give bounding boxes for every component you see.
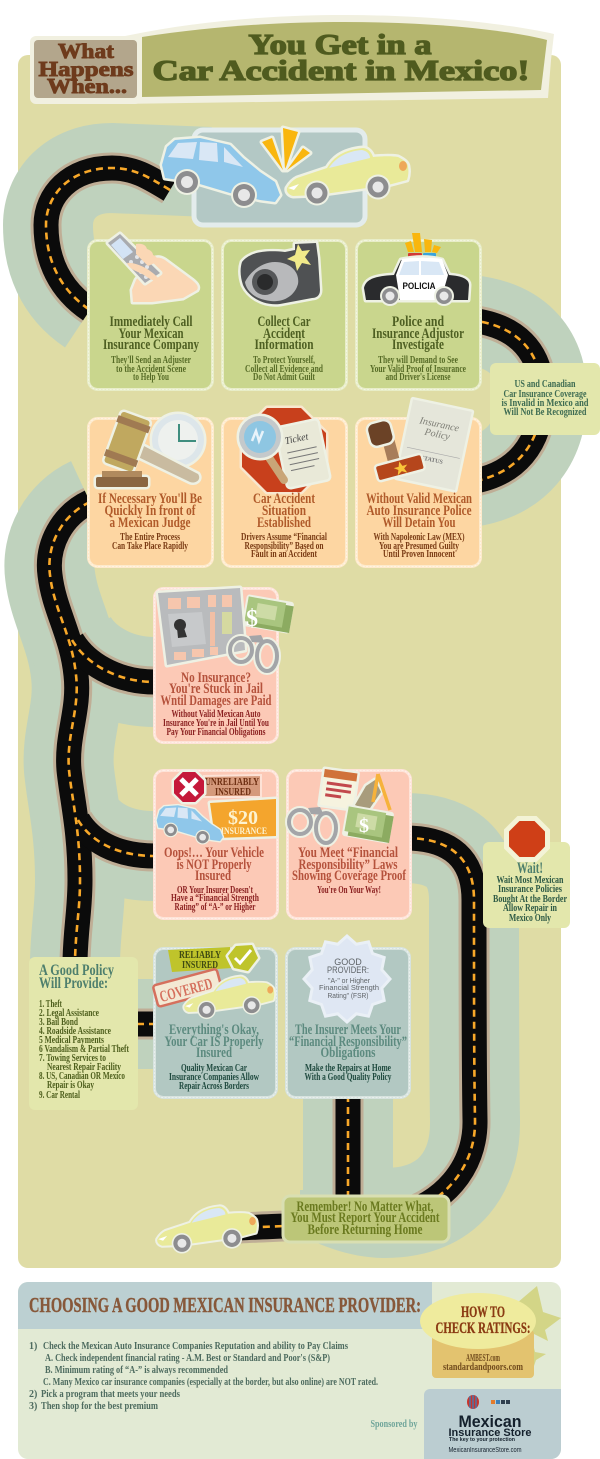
icon: stamp and policy document: STATUS [420, 455, 444, 466]
callout: wait [483, 816, 570, 928]
heading: is NOT Properly [176, 857, 252, 873]
body text [163, 709, 269, 738]
heading: Quickly In front of [104, 503, 196, 519]
body text: Drivers Assume “Financial [241, 532, 327, 543]
badge: good provider: GOOD [334, 957, 362, 967]
icon: ticket and magnifier [239, 408, 330, 492]
heading: Your Car IS Properly [164, 1034, 264, 1050]
icon: yellow car [184, 977, 274, 1019]
heading: CHOOSING A GOOD MEXICAN INSURANCE PROVIDER: [29, 1293, 421, 1317]
body text: to the Accident Scene [116, 364, 186, 375]
list: a good policy will provide: 2. Legal Assistance [39, 1008, 99, 1019]
list: a good policy will provide: 8. US, Canadian OR Mexico [39, 1071, 125, 1082]
body text: Can Take Place Rapidly [112, 541, 188, 552]
body text: Do Not Admit Guilt [253, 372, 315, 383]
list: a good policy will provide: Repair is Okay [47, 1080, 94, 1091]
icon: blue car [162, 138, 280, 208]
icon: check mark [228, 945, 258, 971]
icon: blue car small [157, 805, 223, 844]
heading [366, 491, 472, 531]
heading: You Meet “Financial [298, 845, 398, 861]
step card: judge [88, 410, 212, 566]
body text [245, 355, 323, 383]
how to check ratings: HOW TO [461, 1304, 505, 1321]
body text: With Napoleonic Law (MEX) [374, 532, 464, 543]
list: a good policy will provide: 6 Vandalism & Partial Theft [39, 1044, 129, 1055]
sponsor logo box: The key to your protection [449, 1437, 515, 1443]
body text: You're On Your Way! [317, 885, 381, 896]
coupon: $20 insurance [210, 799, 276, 838]
body text: Pay Your Financial Obligations [166, 727, 266, 738]
callout: remember: You Must Report Your Accident [290, 1210, 440, 1226]
steps list: 3) [29, 1401, 37, 1412]
body text: Until Proven Innocent [383, 549, 456, 560]
icon: hand with phone [108, 234, 198, 302]
callout: wait: Insurance Policies [498, 884, 562, 895]
callout: remember [283, 1196, 449, 1242]
heading: Will Detain You [382, 515, 456, 531]
body text [374, 532, 464, 560]
body text: Rating” of “A-” or Higher [174, 902, 256, 913]
road shoulder bands [48, 168, 542, 1258]
icon: impact burst [262, 128, 310, 170]
sponsored by label: Sponsored by [370, 1419, 418, 1430]
stamp: covered: COVERED [158, 976, 214, 1006]
icon: calendar [320, 769, 357, 809]
steps list: Pick a program that meets your needs [41, 1389, 180, 1400]
heading: Collect Car [258, 314, 311, 330]
heading: No Insurance? [181, 670, 251, 686]
what happens when box: Happens [38, 57, 134, 81]
icon: camera [241, 243, 320, 304]
step card: insurer meets obligations [286, 936, 410, 1098]
heading: Showing Coverage Proof [292, 868, 406, 884]
body text: Your Valid Proof of Insurance [370, 364, 466, 375]
icon: jail door [158, 588, 245, 665]
body text [241, 532, 327, 560]
step card: everything okay [153, 945, 276, 1098]
list: a good policy will provide: A Good Policy [39, 962, 114, 979]
icon: money: $ [359, 815, 369, 837]
steps list: A. Check independent financial rating - A.M. Best or Standard and Poor's (S&P) [45, 1353, 330, 1364]
how to check ratings: CHECK RATINGS: [436, 1320, 530, 1337]
sponsor logo box: Insurance Store [448, 1427, 532, 1439]
body text: Have a “Financial Strength [171, 893, 259, 904]
icon: yellow car [287, 148, 408, 206]
heading [372, 314, 464, 353]
steps list: 1) [29, 1341, 37, 1352]
list: a good policy will provide: 9. Car Rental [39, 1090, 80, 1101]
heading: Investigate [392, 337, 444, 353]
icon: handcuffs [289, 807, 336, 843]
body text [169, 1063, 260, 1092]
main background panel [18, 55, 561, 1268]
body text: Collect all Evidence and [245, 364, 323, 375]
icon: stop sign [504, 816, 550, 862]
body text: Insurance You're in Jail Until You [163, 718, 269, 729]
body text: The Entire Process [120, 532, 180, 543]
coupon: $20 insurance: INSURANCE [221, 826, 267, 836]
badge: good provider: Financial Strength [319, 985, 379, 992]
body text [112, 532, 188, 552]
body text: To Protect Yourself, [253, 355, 315, 366]
badge: good provider [304, 936, 390, 1022]
icon: keys and tag [355, 774, 390, 811]
heading: Obligations [320, 1045, 376, 1061]
icon: police car: POLICIA [402, 281, 436, 292]
heading [254, 314, 314, 353]
banner headline [152, 30, 530, 87]
icon: red x octagon [174, 772, 204, 802]
list: a good policy will provide: 1. Theft [39, 999, 62, 1010]
heading: Insurance Adjustor [372, 326, 464, 342]
body text [304, 1063, 392, 1083]
callout: wait: Wait Most Mexican [496, 875, 564, 886]
icon: stamp and policy document [365, 399, 472, 490]
icon: ticket and magnifier: Ticket [284, 431, 310, 447]
sponsor logo box [424, 1389, 561, 1459]
list: a good policy will provide [29, 957, 138, 1110]
heading: Insurance Company [103, 337, 200, 353]
steps list: Check the Mexican Auto Insurance Companies Reputation and ability to Pay Claims [43, 1341, 348, 1352]
step card: situation established [222, 408, 346, 566]
heading: The Insurer Meets Your [295, 1022, 401, 1038]
heading: Police and [392, 314, 444, 330]
heading: Car Accident [253, 491, 315, 507]
icon: handcuffs [230, 635, 277, 671]
how to check ratings: AMBEST.com [466, 1353, 500, 1364]
steps list: 2) [29, 1389, 37, 1400]
body text: Fault in an Accident [251, 549, 318, 560]
badge: good provider: "A-" or Higher [328, 978, 371, 985]
steps list: B. Minimum rating of “A-” is always recommended [45, 1365, 228, 1376]
body text [111, 355, 191, 383]
icon: money [342, 804, 394, 844]
heading: You're Stuck in Jail [169, 681, 263, 697]
how to check ratings [420, 1286, 561, 1378]
heading: Information [254, 337, 314, 353]
heading: Situation [262, 503, 306, 519]
callout: wait: Bought At the Border [493, 894, 567, 905]
icon: stamp and policy document: Policy [423, 426, 451, 443]
icon: yellow car driving home [157, 1206, 257, 1254]
how to check ratings: standardandpoors.com [443, 1362, 524, 1373]
heading: Without Valid Mexican [366, 491, 472, 507]
steps list [29, 1341, 378, 1412]
heading: a Mexican Judge [110, 515, 191, 531]
banner headline: Car Accident in Mexico! [152, 56, 530, 87]
callout: wait: Mexico Only [509, 913, 551, 924]
step card: collect information [222, 240, 346, 390]
callout: remember: Before Returning Home [308, 1222, 423, 1238]
sponsor logo box: MexicanInsuranceStore.com [448, 1445, 522, 1454]
icon: gavel and clock [96, 410, 204, 487]
tag: unreliably insured: UNRELIABLY [205, 776, 259, 788]
body text: and Driver's License [386, 372, 451, 383]
tag: unreliably insured [204, 775, 261, 798]
heading [103, 314, 200, 353]
badge: good provider: PROVIDER: [327, 965, 369, 975]
what happens when box [30, 36, 141, 104]
list: a good policy will provide: Nearest Repair Facility [47, 1062, 121, 1073]
body text: You are Presumed Guilty [379, 541, 459, 552]
heading: “Financial Responsibility” [289, 1034, 407, 1050]
callout: coverage invalid [490, 363, 600, 435]
heading [164, 845, 264, 884]
step card: call insurance company [88, 234, 212, 390]
heading: Everything's Okay, [169, 1022, 259, 1038]
banner ribbon [115, 15, 554, 104]
icon: stamp and policy document: Insurance [418, 415, 461, 435]
list: a good policy will provide: Will Provide: [39, 975, 108, 992]
step card: meet financial responsibility [288, 769, 410, 918]
body text: Responsibility” Based on [244, 541, 324, 552]
heading: Insured [195, 868, 231, 884]
tag: reliably insured: INSURED [182, 960, 218, 971]
heading: Accident [263, 326, 305, 342]
heading: Oops!… Your Vehicle [164, 845, 264, 861]
list: a good policy will provide: 5 Medical Payments [39, 1035, 104, 1046]
heading: Responsibility” Laws [298, 857, 398, 873]
road asphalt [46, 168, 542, 1228]
crash backing panel [194, 130, 365, 225]
heading [160, 670, 272, 709]
heading: Wntil Damages are Paid [160, 693, 272, 709]
steps list: C. Many Mexico car insurance companies (especially at the border, but also online) are NOT rated. [43, 1377, 378, 1388]
step card: no insurance jail [154, 588, 294, 742]
callout: wait: Wait! [517, 860, 543, 877]
what happens when box: What [58, 39, 114, 63]
heading [292, 845, 406, 884]
tag: reliably insured: RELIABLY [179, 950, 221, 961]
icon: money [242, 594, 294, 634]
heading: Established [257, 515, 311, 531]
crash scene [162, 128, 408, 225]
body text: OR Your Insurer Doesn't [177, 885, 253, 896]
header band [18, 1282, 432, 1329]
body text: Insurance Companies Allow [169, 1072, 260, 1083]
step card: police detain [356, 399, 480, 566]
heading: Your Mexican [118, 326, 184, 342]
body text: to Help You [133, 372, 169, 383]
heading [98, 491, 202, 531]
tag: unreliably insured: INSURED [215, 786, 251, 798]
heading [253, 491, 315, 531]
steps list: Then shop for the best premium [41, 1401, 159, 1412]
step card: not properly insured [154, 770, 278, 918]
callout: coverage invalid: US and Canadian [514, 379, 576, 390]
heading: If Necessary You'll Be [98, 491, 202, 507]
heading [289, 1022, 407, 1061]
body text: Repair Across Borders [179, 1081, 249, 1092]
body text: They will Demand to See [378, 355, 458, 366]
badge: good provider: Rating" (FSR) [328, 993, 368, 1000]
callout: wait: Allow Repair in [503, 903, 557, 914]
list: a good policy will provide: 4. Roadside Assistance [39, 1026, 111, 1037]
callout: remember: Remember! No Matter What, [296, 1199, 434, 1215]
title banner [30, 15, 554, 104]
icon: police car [364, 233, 469, 306]
what happens when box: When... [47, 74, 127, 98]
body text: With a Good Quality Policy [304, 1072, 392, 1083]
body text: Quality Mexican Car [181, 1063, 247, 1074]
winding road [46, 168, 542, 1258]
body text [370, 355, 466, 383]
icon: logo mark [467, 1395, 510, 1409]
tag: reliably insured [168, 947, 232, 972]
banner headline: You Get in a [248, 30, 432, 61]
heading: Immediately Call [110, 314, 192, 330]
heading [164, 1022, 264, 1061]
list: a good policy will provide: 3. Bail Bond [39, 1017, 78, 1028]
body text: Make the Repairs at Home [305, 1063, 391, 1074]
heading: Insured [196, 1045, 232, 1061]
heading: Auto Insurance Police [366, 503, 472, 519]
sponsor logo box: Mexican [458, 1412, 522, 1431]
coupon: $20 insurance: $20 [228, 807, 258, 829]
body text: They'll Send an Adjuster [111, 355, 191, 366]
bottom panel: choosing a provider [18, 1282, 561, 1459]
body text: Without Valid Mexican Auto [172, 709, 260, 720]
body text [171, 885, 259, 913]
list: a good policy will provide: 7. Towing Services to [39, 1053, 106, 1064]
step card: police investigate [356, 233, 480, 390]
icon: money: $ [246, 606, 258, 632]
